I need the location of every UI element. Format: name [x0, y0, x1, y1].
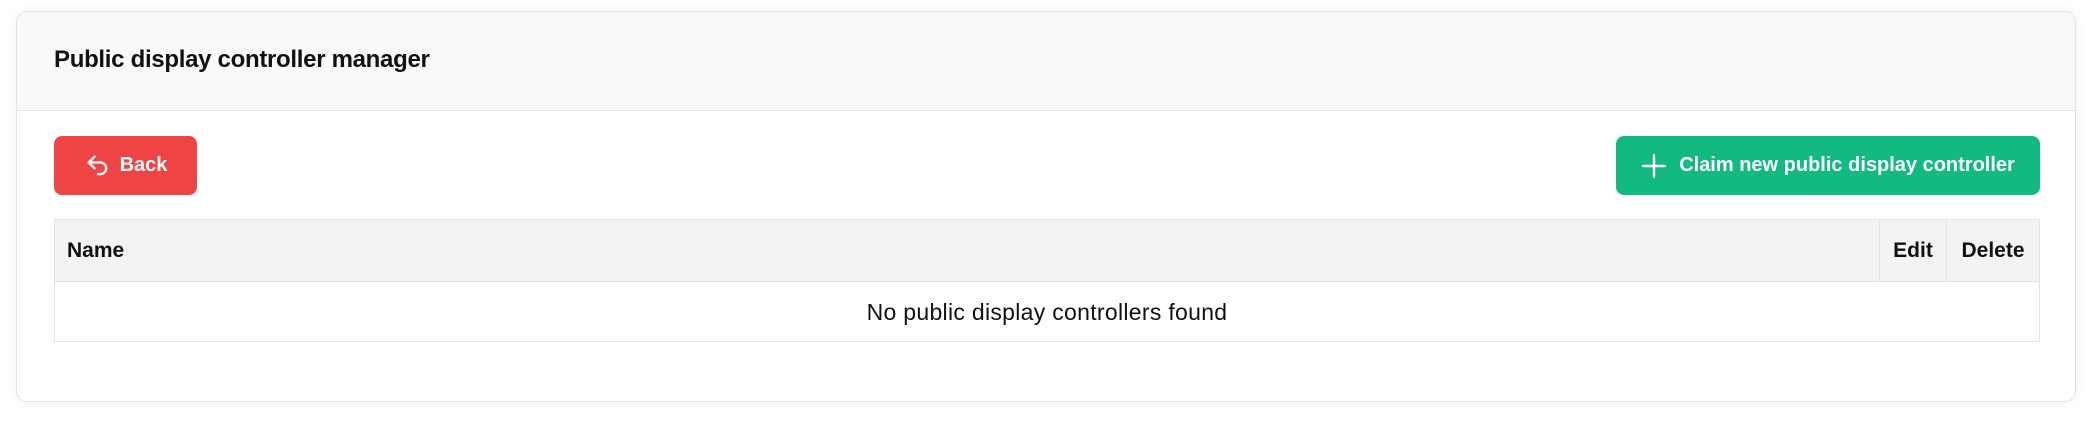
- button: back: [54, 136, 197, 195]
- column header: Delete: [1946, 220, 2039, 282]
- column header: Delete: Delete: [1961, 238, 2025, 262]
- column header: Name: Name: [67, 238, 124, 262]
- button: claim new: [1616, 136, 2040, 195]
- table: [54, 219, 2040, 342]
- button: back: Back: [120, 154, 167, 176]
- header bar: [17, 12, 2075, 111]
- title: Public display controller manager: [54, 46, 430, 73]
- button: claim new: Claim new public display controller: [1679, 154, 2015, 176]
- column header: Name: [55, 220, 1879, 282]
- empty message: No public display controllers found: [867, 298, 1227, 324]
- column header: Edit: Edit: [1893, 238, 1933, 262]
- column header: Edit: [1879, 220, 1946, 282]
